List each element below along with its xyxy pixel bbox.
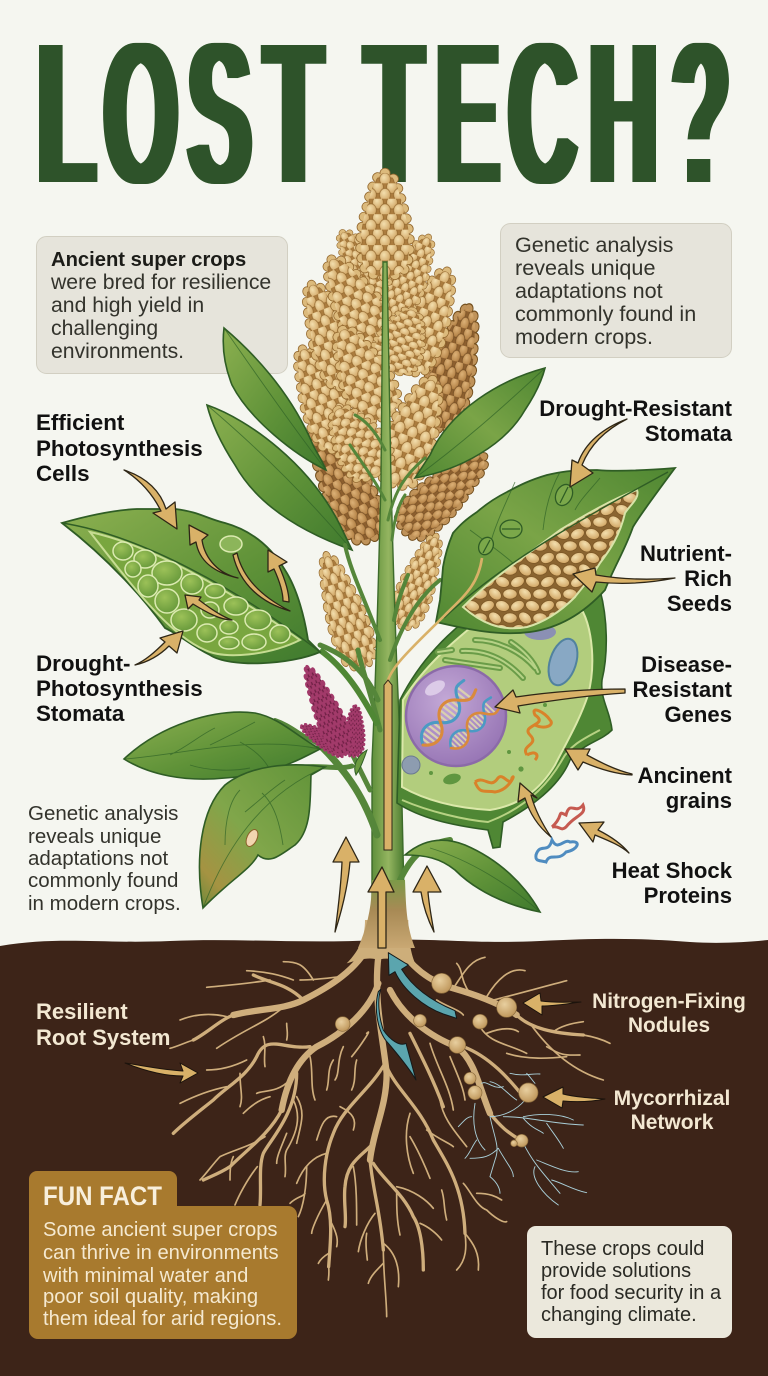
arrow: stoma stalk (233, 553, 290, 611)
arrow: resilient root (125, 1063, 198, 1083)
right leaf with seeds (436, 468, 675, 633)
label: drought-photosynthesis stomata: Photosynthesis (36, 676, 203, 701)
arrow: up centre (368, 867, 394, 948)
text: genetic analysis left: Genetic analysis (28, 802, 178, 825)
arrow: leaf flow 1 (189, 525, 238, 578)
label: resilient root system: Root System (36, 1025, 170, 1050)
arrow: drought stomata (570, 419, 627, 487)
arrow: nutrient seeds (573, 568, 675, 592)
trunk flare (347, 920, 417, 967)
arrow: drought photosynthesis (135, 631, 183, 665)
panel: ancient super crops (36, 236, 288, 374)
photosynthesis leaf (62, 509, 378, 725)
protein: red coil (552, 805, 584, 829)
label: nutrient-rich seeds: Nutrient- (640, 541, 732, 566)
leaf cells (113, 542, 290, 650)
label: heat shock proteins (612, 858, 733, 908)
arrow: disease genes (495, 689, 625, 713)
soil background (0, 939, 768, 1376)
panel: plant cell (397, 590, 612, 848)
panel: ancient super crops: challenging (51, 317, 158, 340)
protein: blue coil (536, 840, 577, 862)
text: genetic analysis left (28, 802, 181, 915)
text: genetic analysis left: reveals unique (28, 825, 161, 848)
lower right leaf (405, 840, 540, 912)
arrow: leaf flow 2 (268, 550, 289, 602)
stem arrow line (386, 558, 482, 850)
label: ancinent grains: grains (666, 788, 732, 813)
seed pocket (463, 490, 638, 628)
label: efficient photosynthesis cells (36, 410, 203, 486)
label: drought-resistant stomata: Stomata (645, 421, 733, 446)
arrow: cell flow (185, 595, 232, 620)
label: mycorrhizal network: Mycorrhizal (614, 1087, 730, 1110)
panel: food security: for food security in a (541, 1282, 722, 1304)
arrow: cell wall (518, 783, 551, 837)
panel: food security: changing climate. (541, 1304, 697, 1326)
fun fact tab (29, 1171, 177, 1221)
label: nutrient-rich seeds: Rich (684, 566, 732, 591)
arrow: nitrogen nodules (523, 993, 581, 1015)
small organelles (402, 703, 547, 786)
title: LOST TECH? (38, 0, 729, 228)
endoplasmic folds (438, 640, 538, 678)
label: drought-photosynthesis stomata: Drought- (36, 651, 131, 676)
label: mycorrhizal network: Network (631, 1111, 714, 1134)
purple flower spike (296, 663, 366, 760)
label: ancinent grains: Ancinent (637, 763, 733, 788)
root system (170, 920, 610, 1317)
panel: ancient super crops: were bred for resilience (50, 271, 271, 294)
arrow: mycorrhizal (543, 1087, 605, 1108)
teal arrow up (388, 953, 457, 1018)
label: disease-resistant genes: Genes (664, 702, 732, 727)
text: genetic analysis left: commonly found (28, 869, 178, 892)
cytoplasm (402, 612, 592, 810)
DNA helices (416, 679, 501, 754)
label: nitrogen-fixing nodules (592, 990, 746, 1037)
text: genetic analysis left: adaptations not (28, 847, 169, 870)
label: drought-resistant stomata (539, 396, 733, 446)
panel: fun fact (29, 1171, 297, 1339)
label: drought-photosynthesis stomata: Stomata (36, 701, 125, 726)
vacuole (543, 635, 583, 689)
label: efficient photosynthesis cells: Cells (36, 461, 90, 486)
label: efficient photosynthesis cells: Efficient (36, 410, 125, 435)
lower left leaf (124, 712, 320, 779)
text: genetic analysis left: in modern crops. (28, 892, 181, 915)
side branches (275, 415, 450, 880)
stomata (476, 482, 576, 557)
panel: genetic analysis top: Genetic analysis (515, 232, 674, 257)
teal arrow down (376, 989, 416, 1080)
stoma (220, 536, 242, 552)
fun fact text: with minimal water and (42, 1265, 248, 1287)
panel: genetic analysis top: reveals unique (515, 255, 655, 280)
label: nitrogen-fixing nodules: Nodules (628, 1014, 710, 1037)
fun fact text: can thrive in environments (43, 1242, 279, 1264)
fun fact text: poor soil quality, making (43, 1286, 258, 1308)
panel: ancient super crops: Ancient super crops (51, 249, 246, 271)
label: nutrient-rich seeds (640, 541, 732, 616)
panel: food security: provide solutions (541, 1260, 691, 1282)
panel: genetic analysis top (500, 224, 732, 358)
fun fact heading: FUN FACT (43, 1181, 162, 1211)
fun fact body (29, 1206, 297, 1339)
nodules (335, 973, 538, 1147)
medium roots (173, 975, 583, 1270)
cell wall (397, 590, 612, 848)
wall strip (402, 730, 600, 822)
label: nutrient-rich seeds: Seeds (667, 591, 732, 616)
label: efficient photosynthesis cells: Photosynthesis (36, 436, 203, 461)
fun fact text (42, 1219, 282, 1330)
panel: ancient super crops: and high yield in (51, 294, 204, 317)
seed head spikes (283, 173, 497, 671)
arrow: heat shock (579, 822, 629, 853)
panel: food security (527, 1226, 732, 1338)
label: drought-photosynthesis stomata (36, 651, 203, 726)
panel: food security: These crops could (541, 1238, 704, 1260)
label: ancinent grains (637, 763, 733, 813)
mycorrhizal network (458, 1073, 587, 1205)
label: disease-resistant genes: Disease- (641, 652, 732, 677)
label: drought-resistant stomata: Drought-Resistant (539, 396, 733, 421)
label: disease-resistant genes (633, 652, 733, 727)
plant (62, 173, 675, 948)
orange organelles (475, 710, 551, 792)
label: resilient root system: Resilient (36, 999, 128, 1024)
cutaway (90, 532, 300, 655)
lower spotted leaf (199, 765, 325, 908)
stem base (358, 880, 415, 948)
arrow: up right (413, 866, 441, 932)
arrows (124, 419, 675, 1108)
label: mycorrhizal network (614, 1087, 730, 1134)
panel: genetic analysis top: modern crops. (515, 324, 653, 349)
arrow: up left (333, 837, 359, 932)
label: heat shock proteins: Heat Shock (612, 858, 733, 883)
thin roots (170, 957, 610, 1317)
fun fact text: them ideal for arid regions. (43, 1308, 282, 1330)
panel: ancient super crops: environments. (51, 340, 184, 363)
label: disease-resistant genes: Resistant (633, 677, 733, 702)
fun fact text: Some ancient super crops (43, 1219, 278, 1241)
small leaf (355, 750, 367, 775)
label: nitrogen-fixing nodules: Nitrogen-Fixing (592, 990, 746, 1013)
arrow: ancient grains (565, 749, 632, 775)
arrow: efficient photosynthesis (124, 470, 177, 529)
thick roots (233, 943, 517, 1160)
nucleus (406, 666, 506, 766)
main stem (372, 262, 405, 940)
label: resilient root system (36, 999, 170, 1050)
upper leaves (207, 328, 545, 550)
label: heat shock proteins: Proteins (644, 883, 732, 908)
panel: genetic analysis top: commonly found in (515, 301, 696, 326)
panel: genetic analysis top: adaptations not (515, 278, 663, 303)
